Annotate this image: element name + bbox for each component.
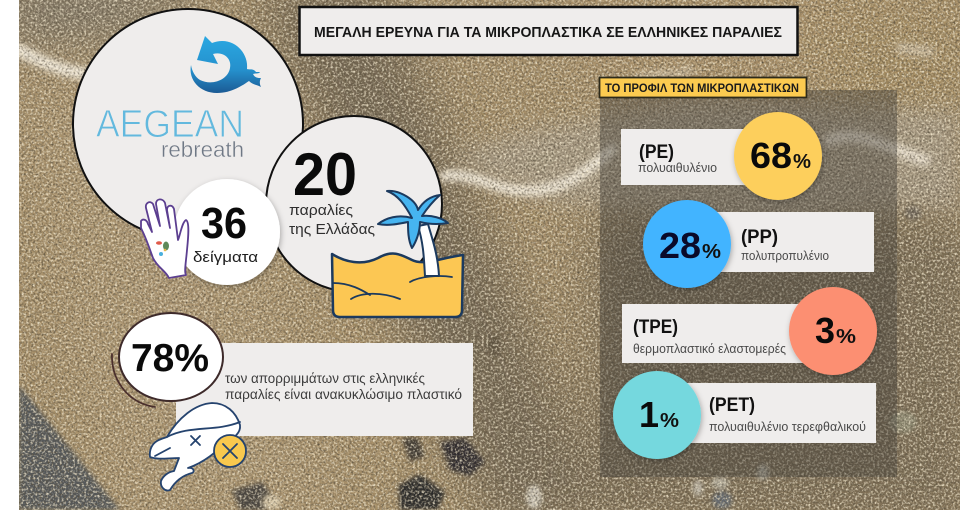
panel: logo circle <box>73 9 303 239</box>
row: PE 68%: % <box>793 151 811 173</box>
panel: 36 samples circle: 36 <box>201 199 247 248</box>
icon: aegean rebreath swirl logo <box>191 36 261 93</box>
row: PE 68%: 68 <box>750 135 792 176</box>
icon: hand with microplastics <box>141 199 188 278</box>
row: PET 1%: % <box>660 410 679 432</box>
row: PP 28% <box>643 200 874 288</box>
row: TPE 3%: (TPE) <box>633 317 678 338</box>
78% bubble <box>112 313 223 407</box>
icon: palm tree on sand <box>332 191 463 317</box>
panel: 36 samples circle: δείγματα <box>193 249 258 266</box>
stones <box>232 206 921 510</box>
row: TPE 3%: % <box>836 326 856 348</box>
icon: dead fish <box>150 403 246 490</box>
row: PET 1%: 1 <box>639 394 659 435</box>
panel: 20 beaches circle: της Ελλάδας <box>289 221 375 238</box>
row: PET 1%: πολυαιθυλένιο τερεφθαλικού <box>709 420 866 434</box>
section heading: microplastics profile <box>600 78 806 98</box>
section heading: microplastics profile: ΤΟ ΠΡΟΦΙΛ ΤΩΝ ΜΙΚΡΟΠΛΑΣΤΙΚΩΝ <box>605 81 799 95</box>
78% bubble: 78% <box>131 337 209 380</box>
row: TPE 3%: 3 <box>815 310 835 351</box>
panel: 20 beaches circle <box>266 116 442 292</box>
title: ΜΕΓΑΛΗ ΕΡΕΥΝΑ ΓΙΑ ΤΑ ΜΙΚΡΟΠΛΑΣΤΙΚΑ ΣΕ ΕΛΛΗΝΙΚΕΣ ΠΑΡΑΛΙΕΣ <box>314 24 782 41</box>
row: PET 1% <box>613 371 876 459</box>
badge: x mark <box>214 435 246 467</box>
title <box>300 7 798 55</box>
translucent panel backdrop <box>600 90 897 477</box>
row: PE 68%: (PE) <box>639 142 674 163</box>
row: PE 68% <box>621 112 822 200</box>
logo wordmark: AEGEAN <box>96 103 244 146</box>
panel: 36 samples circle <box>174 179 280 285</box>
row: PET 1%: (PET) <box>709 395 755 416</box>
logo wordmark: rebreath <box>161 137 244 162</box>
logo wordmark <box>96 103 244 162</box>
row: PP 28%: (PP) <box>741 227 778 248</box>
panel: 20 beaches circle: 20 <box>293 141 357 208</box>
callout box: recyclable plastic text: παραλίες είναι ανακυκλώσιμο πλαστικό <box>225 387 462 402</box>
row: PP 28%: 28 <box>659 225 701 266</box>
panel: 20 beaches circle: παραλίες <box>289 202 353 219</box>
row: PE 68%: πολυαιθυλένιο <box>638 161 717 175</box>
row: TPE 3% <box>622 287 877 375</box>
wet sand and foam <box>450 100 960 226</box>
row: PP 28%: % <box>702 241 721 263</box>
dark shadow corner <box>19 385 120 510</box>
row: TPE 3%: θερμοπλαστικό ελαστομερές <box>633 342 786 356</box>
callout box: recyclable plastic text <box>176 343 473 436</box>
callout box: recyclable plastic text: των απορριμμάτων στις ελληνικές <box>225 371 425 386</box>
row: PP 28%: πολυπροπυλένιο <box>741 249 829 263</box>
